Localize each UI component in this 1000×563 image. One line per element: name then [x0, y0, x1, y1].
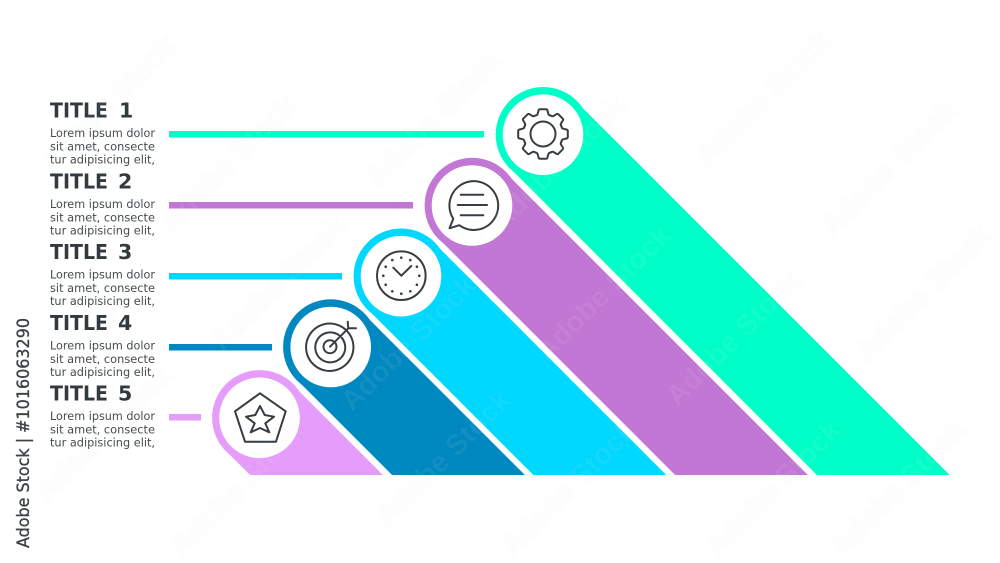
watermark pattern: Adobe Stock	[530, 219, 678, 368]
icon: clock	[377, 251, 426, 300]
text block: title 2: 2	[118, 170, 132, 194]
circle: step 1	[503, 94, 583, 175]
text block: title 1: TITLE	[50, 98, 108, 122]
text block: title 4: Lorem ipsum dolor	[50, 338, 155, 352]
text block: title 2: TITLE	[50, 170, 108, 194]
text block: title 1: sit amet, consecte	[50, 139, 155, 153]
text block: title 3	[50, 240, 155, 308]
text block: title 4	[50, 311, 155, 379]
text block: title 2: Lorem ipsum dolor	[50, 197, 155, 211]
watermark pattern: Adobe Stock	[825, 414, 973, 563]
text block: title 2: sit amet, consecte	[50, 210, 155, 224]
text block: title 5: TITLE	[50, 382, 108, 406]
circle: step 4	[290, 307, 371, 387]
connector line: step 1	[169, 131, 484, 138]
text block: title 5: sit amet, consecte	[50, 422, 155, 436]
stock id caption: Adobe Stock | #1016063290	[14, 318, 34, 548]
text block: title 5	[50, 382, 155, 450]
band: step 4 blue	[283, 299, 525, 475]
watermark pattern: Adobe Stock	[485, 89, 633, 238]
watermark pattern: Adobe Stock	[360, 44, 508, 193]
text block: title 3: 3	[118, 240, 132, 264]
icon: gear	[518, 109, 568, 159]
circle: step 2	[432, 165, 512, 246]
watermark pattern: Adobe Stock	[700, 414, 848, 563]
text block: title 5: Lorem ipsum dolor	[50, 409, 155, 423]
watermark pattern: Adobe Stock	[660, 264, 808, 413]
band: step 5 pink	[212, 370, 383, 475]
watermark pattern: Adobe Stock	[335, 269, 483, 418]
watermark pattern: Adobe Stock	[690, 24, 838, 173]
text block: title 4: TITLE	[50, 311, 108, 335]
connector line: step 2	[169, 202, 413, 208]
watermark pattern: Adobe Stock	[35, 29, 183, 178]
text block: title 1	[50, 98, 155, 167]
watermark pattern: Adobe Stock	[370, 384, 518, 533]
icon: star pentagon	[235, 393, 286, 442]
icon: target	[306, 322, 356, 371]
band: step 3 cyan	[354, 228, 666, 475]
text block: title 4: 4	[118, 311, 132, 335]
watermark pattern: Adobe Stock	[30, 359, 178, 508]
text block: title 4: sit amet, consecte	[50, 352, 155, 366]
text block: title 5: 5	[118, 382, 132, 406]
text block: title 3: tur adipisicing elit,	[50, 294, 155, 308]
text block: title 1: 1	[119, 98, 133, 122]
watermark pattern: Adobe Stock	[815, 94, 963, 243]
text block: title 3: sit amet, consecte	[50, 281, 155, 295]
text block: title 2	[50, 170, 155, 238]
watermark pattern: Adobe Stock	[850, 219, 998, 368]
icon: chat bubble	[449, 181, 498, 230]
text block: title 5: tur adipisicing elit,	[50, 436, 155, 450]
circle: step 5	[219, 378, 300, 458]
circle: step 3	[361, 236, 441, 316]
connector line: step 4	[169, 344, 272, 350]
text block: title 3: Lorem ipsum dolor	[50, 268, 155, 282]
connector line: step 5	[169, 414, 201, 420]
connector line: step 3	[169, 273, 342, 280]
watermark pattern: Adobe Stock	[155, 89, 303, 238]
text block: title 1: Lorem ipsum dolor	[50, 126, 155, 140]
text block: title 1: tur adipisicing elit,	[50, 153, 155, 167]
text block: title 4: tur adipisicing elit,	[50, 365, 155, 379]
watermark pattern: Adobe Stock	[205, 209, 353, 358]
text block: title 3: TITLE	[50, 240, 108, 264]
text block: title 2: tur adipisicing elit,	[50, 224, 155, 238]
watermark pattern: Adobe Stock	[495, 414, 643, 563]
band: step 1 teal	[496, 87, 950, 475]
watermark pattern: Adobe Stock	[165, 414, 313, 563]
band: step 2 purple	[425, 158, 808, 475]
